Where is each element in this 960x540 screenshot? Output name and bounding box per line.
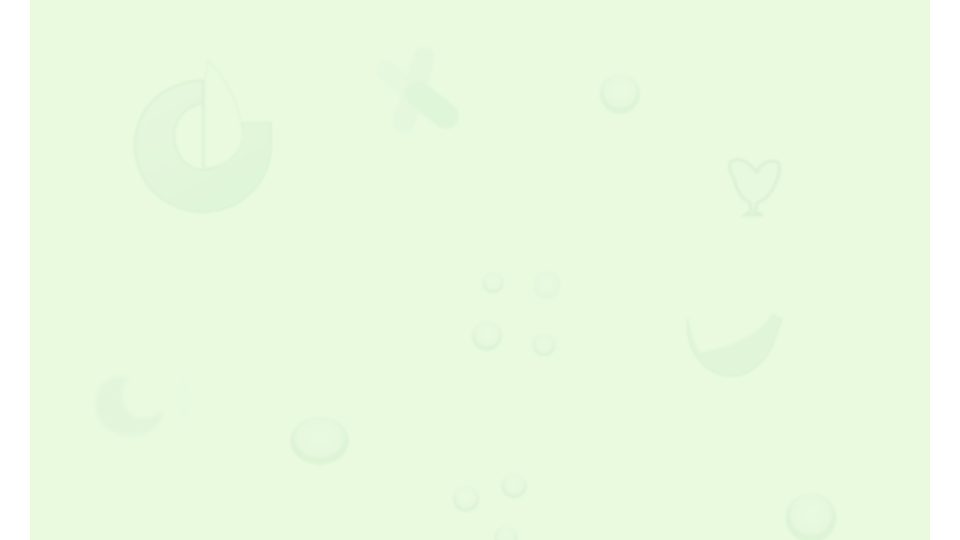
- droplet 4: [532, 334, 556, 356]
- icon: large droplet bottom right: [786, 493, 836, 540]
- icon: goblet shape: [730, 160, 780, 215]
- icon: banana crescent: [687, 313, 782, 376]
- droplet 6: [502, 474, 526, 498]
- icon: oval pebble: [290, 417, 348, 465]
- droplet 7: [494, 526, 518, 540]
- droplet 2: [533, 271, 561, 299]
- droplet 1: [482, 272, 504, 294]
- icon: droplet top centre: [600, 74, 640, 114]
- droplet 5: [453, 486, 479, 512]
- icon: crossed capsule shape: [386, 58, 446, 122]
- droplet cluster centre: [472, 271, 561, 356]
- icon: crescent ring with leaf: [135, 60, 271, 212]
- icon: faint moon lower left: [95, 370, 187, 436]
- droplet cluster bottom: [453, 474, 526, 540]
- droplet 3: [472, 321, 502, 351]
